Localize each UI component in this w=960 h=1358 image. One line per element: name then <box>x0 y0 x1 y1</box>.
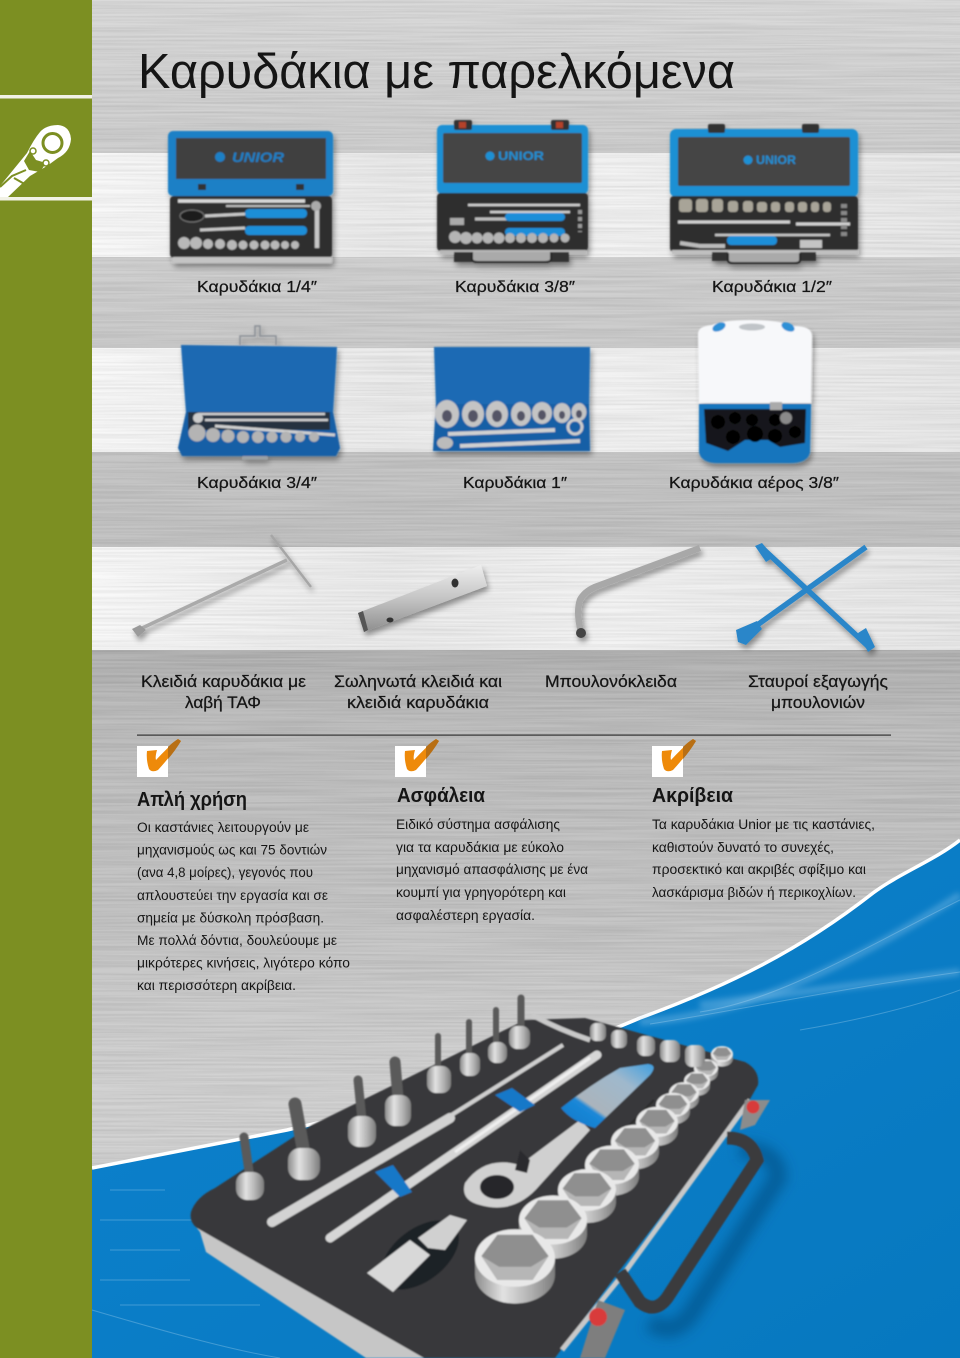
extension bars <box>272 1015 597 1238</box>
label: 1/2: Καρυδάκια 1/2″ <box>712 279 832 296</box>
blue swoosh background <box>92 840 960 1358</box>
product: socket set 1/4 <box>168 131 333 263</box>
panel: safety <box>395 739 588 923</box>
bits row <box>236 998 530 1200</box>
label: T-handle keys: Κλειδιά καρυδάκια με <box>141 673 307 691</box>
body text: ασφαλέστερη εργασία. <box>396 908 535 923</box>
product: socket set 1/2 <box>670 124 858 263</box>
heading: Ασφάλεια <box>397 784 485 807</box>
label: cross wrench: Σταυροί εξαγωγής <box>748 673 888 691</box>
body text: Τα καρυδάκια Unior με τις καστάνιες, <box>652 817 875 832</box>
body text: προσεκτικό και ακριβές σφίξιμο και <box>652 862 866 877</box>
label: 1/4: Καρυδάκια 1/4″ <box>197 279 317 296</box>
icon: check mark <box>652 739 696 777</box>
body text: κουμπί για γρηγορότερη και <box>396 885 566 900</box>
body text: μηχανισμό απασφάλισης με ένα <box>396 862 588 877</box>
body text: (ανα 4,8 μοίρες), γεγονός που <box>137 865 313 880</box>
label: air 3/8: Καρυδάκια αέρος 3/8″ <box>669 475 839 492</box>
product: air socket set 3/8 <box>698 320 812 463</box>
body text: καθιστούν δυνατό το συνεχές, <box>652 840 834 855</box>
dark foam tray <box>191 1018 758 1358</box>
body text: μηχανισμούς ως και 75 δοντιών <box>137 842 327 858</box>
body text: σημεία με δύσκολη πρόσβαση. <box>137 910 324 926</box>
product: socket set 3/4 <box>178 326 340 459</box>
body text: Ειδικό σύστημα ασφάλισης <box>396 817 561 832</box>
universal joint <box>367 1207 471 1303</box>
product: socket set 3/8 <box>437 120 588 262</box>
sockets row <box>475 1046 733 1304</box>
ratchet and handle <box>464 1064 654 1208</box>
label: wheel wrench: Μπουλονόκλειδα <box>545 673 677 691</box>
label: 3/8: Καρυδάκια 3/8″ <box>455 279 575 296</box>
body text <box>396 817 588 923</box>
icon: ratchet wrench <box>0 125 71 197</box>
body text: λασκάρισμα βιδών ή περικοχλίων. <box>652 885 856 900</box>
silver tray side <box>192 1222 440 1358</box>
label: 3/4: Καρυδάκια 3/4″ <box>197 475 317 492</box>
handle shadow <box>650 1150 778 1329</box>
body text: και περισσότερη ακρίβεια. <box>137 978 296 993</box>
small sockets back row <box>590 1023 705 1067</box>
title: Καρυδάκια με παρελκόμενα <box>138 45 735 99</box>
large photo: open socket set tray <box>191 998 778 1358</box>
icon: check mark <box>395 739 439 777</box>
label: tube keys: κλειδιά καρυδάκια <box>347 694 489 712</box>
product: socket set 1/4: UNIOR <box>232 149 285 165</box>
product: socket set 1/2: UNIOR <box>756 153 796 167</box>
label: cross wrench: μπουλονιών <box>771 694 865 712</box>
body text <box>652 817 875 900</box>
label: cross wrench <box>748 673 888 712</box>
heading: Ακρίβεια <box>652 784 733 807</box>
tool: tubular box spanner <box>358 565 487 632</box>
panel: precision <box>652 739 875 900</box>
product: socket set 1 inch <box>433 347 590 451</box>
green sidebar <box>0 0 92 1358</box>
silver rail and handle <box>562 1100 770 1358</box>
body text: μικρότερες κινήσεις, λιγότερο κόπο <box>137 956 350 970</box>
label: T-handle keys: λαβή ΤΑΦ <box>185 694 261 712</box>
body text: για τα καρυδάκια με εύκολο <box>396 840 564 855</box>
label: tube keys <box>334 673 502 712</box>
panel: easy use <box>137 739 350 993</box>
label: T-handle keys <box>141 673 307 712</box>
label: tube keys: Σωληνωτά κλειδιά και <box>334 673 502 691</box>
tool: L-shaped wheel wrench <box>576 548 700 638</box>
body text: Οι καστάνιες λειτουργούν με <box>137 820 309 835</box>
body text: απλουστεύει την εργασία και σε <box>137 888 328 903</box>
body text: Με πολλά δόντια, δουλεύουμε με <box>137 933 337 948</box>
tool: blue cross wheel wrench <box>736 543 875 652</box>
tool: T-handle wrench <box>132 535 311 637</box>
heading: Απλή χρήση <box>137 788 247 811</box>
label: 1 inch: Καρυδάκια 1″ <box>463 475 567 492</box>
icon: check mark <box>137 739 181 777</box>
body text <box>137 820 350 993</box>
product: socket set 3/8: UNIOR <box>498 149 544 163</box>
